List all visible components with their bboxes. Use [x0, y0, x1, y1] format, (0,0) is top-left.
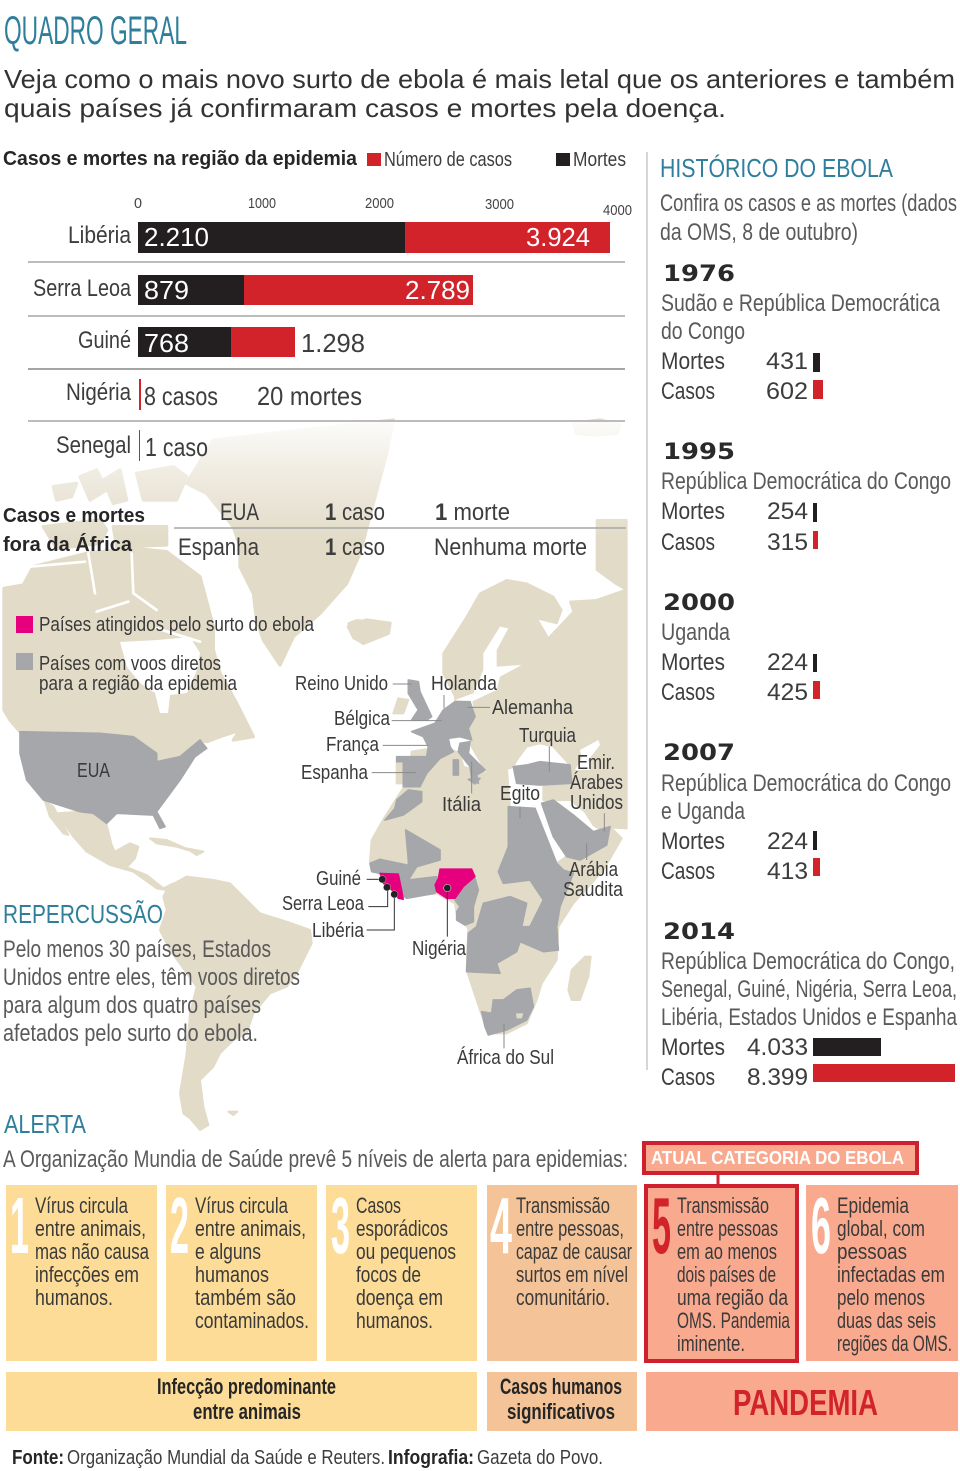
card 3: [326, 1181, 477, 1361]
repercussion text block: para algum dos quatro países: [3, 992, 261, 1019]
card 4: entre pessoas,: [516, 1216, 624, 1241]
map: countries: [20, 680, 610, 1048]
band: casos humanos: Casos humanos: [500, 1374, 622, 1399]
history 2000: Mortes: [661, 649, 725, 676]
card 4: [487, 1181, 637, 1361]
card 4: surtos em nível: [516, 1262, 628, 1287]
card 1: [6, 1181, 157, 1361]
card 6: [806, 1181, 958, 1361]
card 1: mas não causa: [35, 1239, 150, 1264]
source: Fonte:: [12, 1447, 64, 1469]
map legend: [16, 614, 315, 695]
chart axis: 0: [134, 195, 142, 212]
row: Serra Leoa: Serra Leoa: [33, 275, 132, 302]
map labels: Árabes: [570, 771, 623, 794]
row: Nigéria: Nigéria: [66, 379, 132, 406]
history 1976: [661, 262, 941, 405]
band: casos humanos: [487, 1372, 637, 1431]
band: infecção predominante: [6, 1372, 477, 1431]
card 2: também são: [195, 1285, 296, 1310]
history 1976: Casos: [661, 378, 715, 405]
history 1976: 602: [766, 378, 808, 405]
leader line: South Africa: [503, 1023, 505, 1048]
outside Africa table: Espanha: [178, 534, 260, 561]
row: Senegal: [56, 430, 208, 462]
source: Gazeta do Povo.: [477, 1447, 603, 1469]
chart heading: Casos e mortes na região da epidemia: [3, 148, 358, 170]
card 1: 1: [10, 1181, 29, 1270]
history 2007: Casos: [661, 858, 715, 885]
history 2007: e Uganda: [661, 798, 746, 825]
panel: history: [647, 152, 958, 1091]
card 1: infecções em: [35, 1262, 139, 1287]
repercussion text block: afetados pelo surto do ebola.: [3, 1020, 258, 1047]
outside Africa table: 1 caso: [325, 534, 385, 561]
history 1995: [661, 440, 951, 556]
card 3: doença em: [356, 1285, 443, 1310]
history 1995: 254: [767, 498, 808, 525]
row: Serra Leoa: 2.789: [405, 275, 470, 305]
current category callout: [644, 1143, 917, 1185]
card 1: humanos.: [35, 1285, 113, 1310]
history 2014: 2014: [663, 920, 735, 945]
affected countries: [380, 869, 475, 899]
history 2007: Mortes: [661, 828, 725, 855]
card 2: 2: [170, 1181, 189, 1270]
card 4: capaz de causar: [516, 1239, 632, 1264]
card 2: contaminados.: [195, 1308, 309, 1333]
row: Senegal: Senegal: [56, 432, 131, 459]
history 2014: [661, 920, 958, 1091]
card 4: 4: [490, 1181, 512, 1270]
row: Senegal: 1 caso: [145, 432, 208, 462]
card 6: pessoas: [837, 1239, 907, 1264]
bar chart: [28, 222, 625, 462]
subtitle: quais países já confirmaram casos e mortes pela doença.: [4, 93, 726, 123]
card 4: comunitário.: [516, 1285, 610, 1310]
chart axis: 2000: [365, 195, 394, 212]
title: QUADRO GERAL: [4, 9, 187, 53]
card 6: pelo menos: [837, 1285, 925, 1310]
source: [12, 1447, 603, 1469]
card 3: Casos: [356, 1193, 401, 1218]
map labels: Reino Unido: [295, 673, 388, 695]
history 1976: do Congo: [661, 318, 745, 345]
card 2: entre animais,: [195, 1216, 306, 1241]
row: Nigéria: 20 mortes: [257, 381, 362, 411]
card 3: 3: [331, 1181, 350, 1270]
map labels: Holanda: [431, 673, 498, 695]
band: pandemia: PANDEMIA: [733, 1382, 878, 1423]
card 4: Transmissão: [516, 1193, 610, 1218]
leader lines: Europe and Middle East: [372, 684, 604, 860]
map labels: Arábia: [569, 859, 619, 881]
row: Serra Leoa: [33, 275, 473, 305]
repercussion text block: Unidos entre eles, têm voos diretos: [3, 964, 300, 991]
outside Africa table: Nenhuma morte: [434, 534, 587, 561]
band: infecção predominante: Infecção predominante: [157, 1374, 336, 1399]
map labels: Alemanha: [492, 697, 574, 719]
repercussion text block: Pelo menos 30 países, Estados: [3, 936, 271, 963]
history 2000: [661, 591, 820, 706]
history 2014: 8.399: [747, 1064, 808, 1091]
chart legend: [367, 149, 626, 171]
map legend: Países atingidos pelo surto do ebola: [39, 614, 315, 636]
outside Africa table: 1 morte: [435, 499, 510, 526]
row: Nigéria: 8 casos: [144, 381, 218, 411]
panel: history: da OMS, 8 de outubro): [660, 219, 858, 246]
map background: [0, 420, 640, 1130]
row: Guiné: 1.298: [301, 328, 365, 358]
map labels: África do Sul: [457, 1046, 554, 1069]
card 6: 6: [811, 1181, 831, 1270]
band: casos humanos: significativos: [507, 1399, 615, 1424]
outside Africa table: Casos e mortes: [3, 505, 145, 527]
outside Africa table: EUA: [220, 499, 259, 526]
map labels: Unidos: [570, 792, 623, 814]
card 5 current category: entre pessoas: [677, 1216, 778, 1241]
chart legend: Número de casos: [384, 149, 512, 171]
subtitle: [4, 64, 955, 123]
source: Infografia:: [388, 1447, 474, 1469]
row: Serra Leoa: 879: [144, 275, 189, 305]
map labels: EUA: [77, 760, 111, 782]
card 3: esporádicos: [356, 1216, 448, 1241]
card 5 current category: em ao menos: [677, 1239, 777, 1264]
central and south america land: [45, 802, 312, 1130]
card 3: focos de: [356, 1262, 421, 1287]
subtitle: Veja como o mais novo surto de ebola é mais letal que os anteriores e também: [4, 64, 955, 94]
card 5 current category: iminente.: [677, 1331, 745, 1356]
card 3: ou pequenos: [356, 1239, 456, 1264]
history 2007: 2007: [663, 741, 735, 766]
history 1995: Casos: [661, 529, 715, 556]
north america land: [4, 420, 620, 762]
card 5 current category: [646, 1181, 797, 1361]
chart axis: 1000: [248, 195, 276, 212]
row: Guiné: Guiné: [78, 327, 131, 354]
map labels: Guiné: [316, 868, 361, 890]
row: Libéria: 2.210: [144, 222, 209, 252]
band: pandemia: [646, 1372, 958, 1431]
card 5 current category: dois países de: [677, 1262, 776, 1287]
row: Guiné: [78, 327, 365, 358]
africa land: [370, 747, 622, 1033]
chart axis: 3000: [485, 196, 514, 213]
history 2007: 413: [767, 858, 808, 885]
history 2000: 2000: [663, 591, 735, 616]
row: Guiné: 768: [144, 328, 189, 358]
source: Organização Mundial da Saúde e Reuters.: [67, 1447, 385, 1469]
band: infecção predominante: entre animais: [193, 1399, 301, 1424]
map labels: Turquia: [519, 725, 577, 747]
countries: Africa: [370, 807, 573, 1035]
alert heading: A Organização Mundia de Saúde prevê 5 níveis de alerta para epidemias:: [3, 1146, 628, 1173]
outbreak markers: [367, 876, 451, 937]
current category callout: ATUAL CATEGORIA DO EBOLA: [651, 1148, 904, 1168]
card 5 current category: uma região da: [677, 1285, 789, 1310]
map labels: Itália: [442, 794, 482, 816]
chart axis: 4000: [603, 202, 632, 219]
card 3: humanos.: [356, 1308, 433, 1333]
map legend: Países com voos diretos: [39, 653, 221, 675]
chart axis: [134, 195, 632, 219]
history 1995: 315: [767, 529, 808, 556]
card 1: entre animais,: [35, 1216, 146, 1241]
country: USA: [20, 732, 207, 828]
map labels: Emir.: [577, 752, 615, 774]
map labels: Egito: [500, 783, 540, 805]
row: Libéria: [68, 222, 610, 253]
alert heading: [3, 1109, 628, 1173]
card 2: e alguns: [195, 1239, 261, 1264]
map labels: [77, 673, 624, 1069]
repercussion text block: REPERCUSSÃO: [3, 899, 163, 929]
chart legend: Mortes: [573, 149, 626, 171]
map labels: Libéria: [312, 920, 365, 942]
card 2: [166, 1181, 317, 1361]
map labels: França: [326, 734, 380, 756]
card 2: Vírus circula: [195, 1193, 289, 1218]
history 1976: 1976: [663, 262, 735, 287]
map labels: Saudita: [563, 879, 624, 901]
history 1976: 431: [766, 348, 808, 375]
history 1995: 1995: [663, 440, 735, 465]
repercussion text block: [3, 899, 300, 1047]
card 6: global, com: [837, 1216, 925, 1241]
history 2007: [661, 741, 951, 885]
map labels: Espanha: [301, 762, 369, 784]
row: Nigéria: [66, 379, 362, 411]
map labels: Serra Leoa: [282, 893, 365, 915]
history 2014: Mortes: [661, 1034, 725, 1061]
outside Africa table: [3, 499, 626, 561]
card 6: Epidemia: [837, 1193, 910, 1218]
history 1995: Mortes: [661, 498, 725, 525]
card 2: humanos: [195, 1262, 269, 1287]
card 5 current category: 5: [652, 1181, 671, 1270]
history 2000: Uganda: [661, 619, 731, 646]
history 2000: 224: [767, 649, 808, 676]
map legend: para a região da epidemia: [39, 673, 238, 695]
history 2000: Casos: [661, 679, 715, 706]
panel: history: HISTÓRICO DO EBOLA: [660, 153, 894, 183]
map labels: Bélgica: [334, 708, 391, 730]
row: Libéria: 3.924: [526, 222, 590, 252]
card 5 current category: OMS. Pandemia: [677, 1308, 791, 1333]
outside Africa table: 1 caso: [325, 499, 385, 526]
alert heading: ALERTA: [4, 1109, 87, 1139]
eurasia land: [348, 520, 627, 832]
history 2000: 425: [767, 679, 808, 706]
countries: Europe and Middle East: [385, 680, 610, 860]
card 5 current category: Transmissão: [677, 1193, 769, 1218]
history 1976: Mortes: [661, 348, 725, 375]
history 2014: 4.033: [747, 1034, 808, 1061]
card 1: Vírus circula: [35, 1193, 129, 1218]
map labels: Nigéria: [412, 938, 467, 960]
row: Libéria: Libéria: [68, 222, 132, 249]
history 2014: Casos: [661, 1064, 715, 1091]
history 2007: 224: [767, 828, 808, 855]
outside Africa table: fora da África: [3, 533, 133, 556]
